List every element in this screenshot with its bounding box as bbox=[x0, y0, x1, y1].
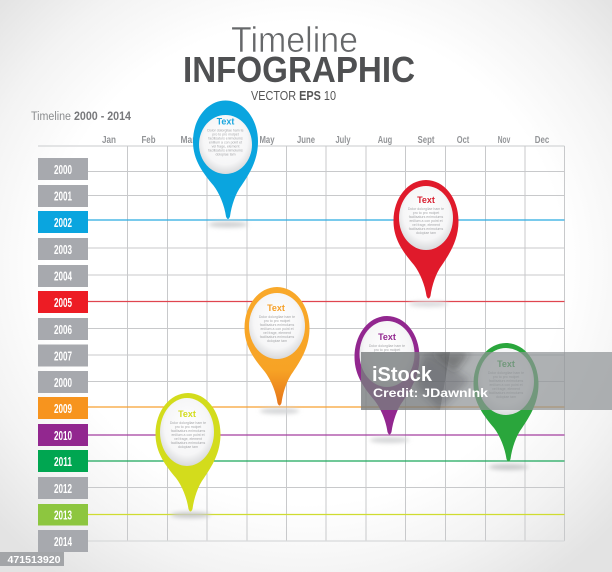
pin: orange: vel frage, element bbox=[263, 331, 291, 335]
title: Timeline bbox=[231, 19, 358, 60]
month headers: June bbox=[297, 135, 315, 146]
year labels: 2001 bbox=[54, 188, 72, 204]
pin: lime: Dolor dolorgilae ham te bbox=[170, 421, 206, 425]
year labels: 2009 bbox=[54, 401, 72, 416]
pin: green: dolopiae tam bbox=[496, 395, 516, 399]
year labels: 2004 bbox=[54, 268, 72, 284]
title: VECTOR EPS 10 bbox=[251, 89, 336, 103]
pin: blue: dolopiae tam bbox=[215, 152, 236, 156]
year labels: 2000 bbox=[54, 375, 72, 390]
pin: purple: Dolor dolorgilae ham te bbox=[369, 344, 405, 348]
month headers: Nov bbox=[498, 135, 511, 146]
pin: purple: pro to pro molpet bbox=[374, 348, 400, 352]
pin: orange: Dolor dolorgilae ham te bbox=[259, 315, 295, 319]
pin: blue: Dolor dolorgilae ham te bbox=[207, 128, 244, 132]
month headers: Dec bbox=[535, 135, 550, 146]
subtitle: timeline range: Timeline 2000 - 2014 bbox=[31, 111, 132, 123]
watermark: image id: 471513920 bbox=[8, 554, 61, 566]
pin: blue: pro to pro molpet bbox=[212, 132, 239, 136]
pin: red: Text bbox=[417, 195, 435, 205]
pin: red: pro to pro molpet bbox=[413, 211, 439, 215]
month headers: Mar bbox=[180, 135, 196, 146]
title: INFOGRAPHIC bbox=[183, 49, 415, 90]
title bbox=[183, 19, 415, 103]
coloured year lines bbox=[88, 220, 564, 514]
pin: lime: Text bbox=[178, 409, 196, 419]
pin: lime bbox=[156, 393, 220, 518]
pin: lime: vel frage, element bbox=[174, 437, 202, 441]
pin: orange: facilisaturs enimolums bbox=[260, 335, 294, 339]
pin: red: facilisaturs enimolums bbox=[409, 215, 443, 219]
pin: orange: enilium a con point et bbox=[260, 327, 294, 331]
pin: red: facilisaturs enimolums bbox=[409, 227, 443, 231]
pin: lime: facilisaturs enimolums bbox=[171, 429, 205, 433]
pin: red: dolopiae tam bbox=[416, 231, 436, 235]
pin: purple bbox=[354, 316, 420, 443]
year labels bbox=[38, 158, 88, 552]
pin: orange bbox=[244, 287, 310, 414]
pin: red: Dolor dolorgilae ham te bbox=[408, 207, 444, 211]
year labels: 2013 bbox=[54, 508, 72, 522]
year labels: 2005 bbox=[54, 295, 72, 310]
month headers: Feb bbox=[142, 135, 156, 146]
watermark: iStock banner: Credit: JDawnInk bbox=[373, 386, 488, 400]
month headers: Sept bbox=[418, 135, 435, 146]
pin: green: facilisaturs enimolums bbox=[489, 379, 523, 383]
year labels: 2012 bbox=[54, 481, 72, 496]
pin: blue: facilisaturs enimolums bbox=[208, 136, 243, 140]
pin: orange: dolopiae tam bbox=[267, 339, 287, 343]
month headers: Aug bbox=[378, 135, 392, 146]
grid bbox=[38, 146, 564, 541]
pin: blue: vel frage, element bbox=[212, 144, 239, 148]
pin: orange: pro to pro molpet bbox=[264, 319, 290, 323]
month headers: Jan bbox=[102, 135, 116, 146]
pin: red bbox=[394, 180, 458, 307]
pin: lime: facilisaturs enimolums bbox=[171, 441, 205, 445]
year labels: 2007 bbox=[54, 348, 72, 364]
year labels: 2002 bbox=[54, 215, 72, 230]
pin: lime: pro to pro molpet bbox=[175, 425, 201, 429]
pin: green bbox=[474, 343, 538, 470]
pin: blue bbox=[193, 100, 258, 228]
pin: lime: enilium a con point et bbox=[171, 433, 205, 437]
pin: orange: Text bbox=[267, 303, 285, 313]
pin: blue: enilium a con point et bbox=[209, 140, 242, 144]
month headers: Oct bbox=[457, 135, 470, 146]
year labels: 2000 bbox=[54, 162, 72, 177]
year labels: 2003 bbox=[54, 242, 72, 257]
watermark: iStock banner bbox=[361, 352, 612, 410]
pin: green: Dolor dolorgilae ham te bbox=[488, 371, 524, 375]
year labels: 2010 bbox=[54, 428, 72, 443]
year labels: 2011 bbox=[54, 454, 72, 469]
pin: orange: facilisaturs enimolums bbox=[260, 323, 294, 327]
pin: green: enilium a con point et bbox=[489, 383, 523, 387]
year labels: 2006 bbox=[54, 322, 72, 337]
pin: purple: Text bbox=[378, 332, 396, 342]
watermark: iStock banner: iStock bbox=[372, 364, 433, 386]
pin: blue: Text bbox=[217, 116, 234, 126]
pin: lime: dolopiae tam bbox=[178, 445, 198, 449]
pin: red: vel frage, element bbox=[412, 223, 440, 227]
month headers: July bbox=[336, 135, 351, 146]
pin: green: vel frage, element bbox=[492, 387, 520, 391]
pin: blue: facilisaturs enimolums bbox=[208, 148, 243, 152]
month headers bbox=[102, 135, 550, 146]
month headers: May bbox=[260, 135, 275, 146]
year labels: 2014 bbox=[54, 534, 72, 549]
pin: green: facilisaturs enimolums bbox=[489, 391, 523, 395]
pin: green: pro to pro molpet bbox=[493, 375, 519, 379]
pin: red: enilium a con point et bbox=[409, 219, 443, 223]
pin: green: Text bbox=[497, 359, 515, 369]
